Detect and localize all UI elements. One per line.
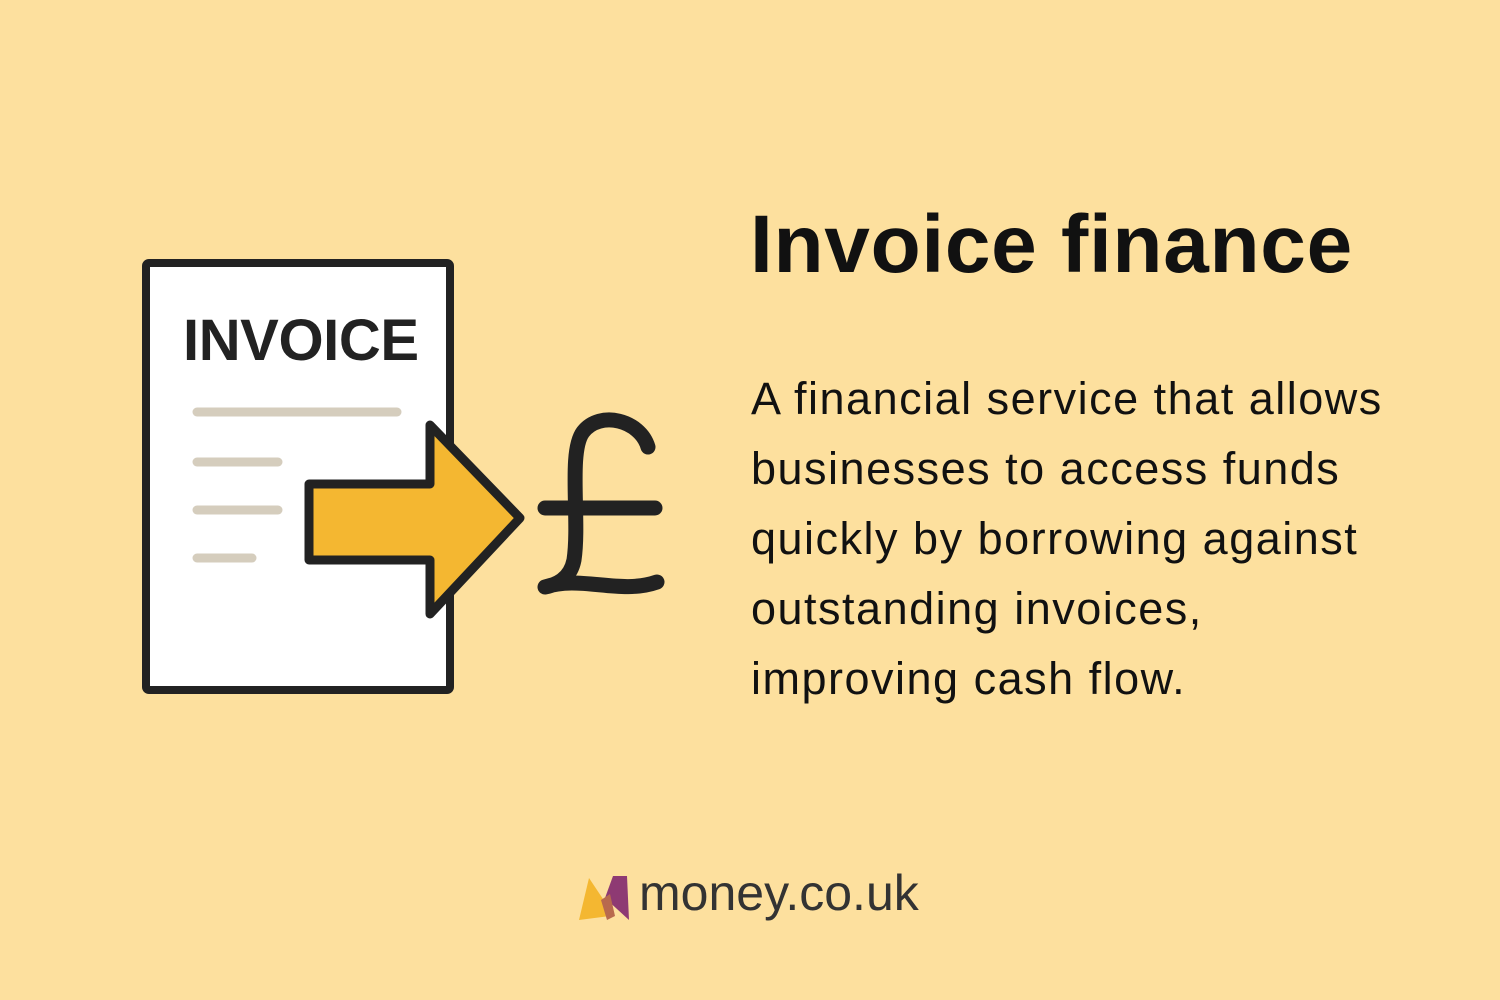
document: INVOICE (183, 308, 419, 373)
text block: description (751, 373, 1383, 704)
icon: invoice document with arrow to pound sign (142, 259, 664, 694)
logo: money.co.uk: money.co.uk (639, 865, 919, 921)
text block: description: quickly by borrowing against (751, 513, 1358, 564)
arrow (309, 425, 520, 614)
text block: description: businesses to access funds (751, 443, 1340, 494)
text block: description: improving cash flow. (751, 653, 1186, 704)
title: Invoice finance (750, 199, 1353, 290)
icon: pound sign (545, 420, 657, 587)
text block: description: A financial service that allows (751, 373, 1383, 424)
document (146, 263, 450, 690)
text block: description: outstanding invoices, (751, 583, 1203, 634)
